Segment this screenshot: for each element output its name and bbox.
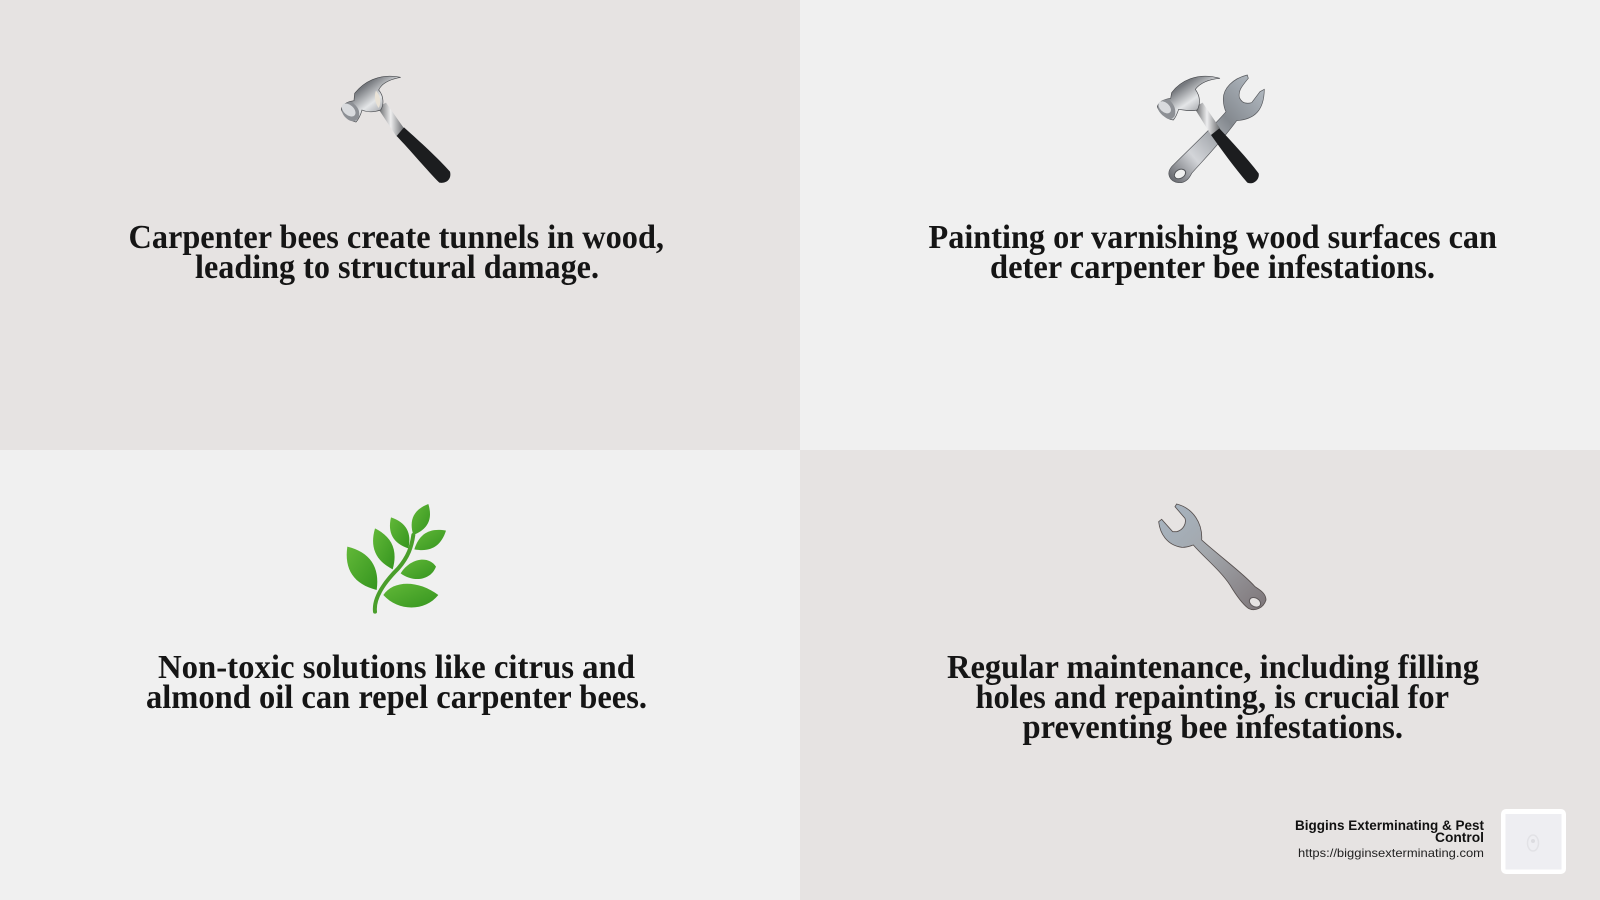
- text: bottom left claim: [146, 649, 647, 716]
- icon: hammer: [339, 76, 450, 183]
- text: top left claim: [128, 219, 664, 286]
- text: bottom right claim: [947, 649, 1479, 746]
- brand name and url: Biggins Exterminating & Pest: [1295, 818, 1484, 833]
- text: bottom right claim: preventing bee infestations.: [1022, 709, 1403, 746]
- icon: herb: [347, 504, 446, 612]
- brand name and url: Control: [1435, 830, 1484, 845]
- text: top left claim: Carpenter bees create tunnels in wood,: [128, 219, 664, 256]
- icon: wrench: [1159, 504, 1266, 610]
- panel: bottom left: [0, 450, 800, 900]
- text: top right claim: [928, 219, 1497, 286]
- text: top right claim: deter carpenter bee infestations.: [990, 249, 1435, 286]
- panel: top right: [800, 0, 1600, 450]
- text: top right claim: Painting or varnishing wood surfaces can: [928, 219, 1497, 256]
- text: top left claim: leading to structural damage.: [195, 249, 599, 286]
- text: bottom left claim: almond oil can repel carpenter bees.: [146, 679, 647, 716]
- text: bottom right claim: Regular maintenance, including filling: [947, 649, 1479, 686]
- logo: [1501, 809, 1566, 874]
- brand name and url: [1295, 818, 1484, 860]
- panel: bottom right: [800, 450, 1600, 900]
- brand name and url: https://bigginsexterminating.com: [1298, 846, 1484, 860]
- text: bottom right claim: holes and repainting, is crucial for: [976, 679, 1449, 716]
- icon: crossed hammer and wrench: [1156, 75, 1264, 183]
- text: bottom left claim: Non-toxic solutions like citrus and: [158, 649, 635, 686]
- panel: top left: [0, 0, 800, 450]
